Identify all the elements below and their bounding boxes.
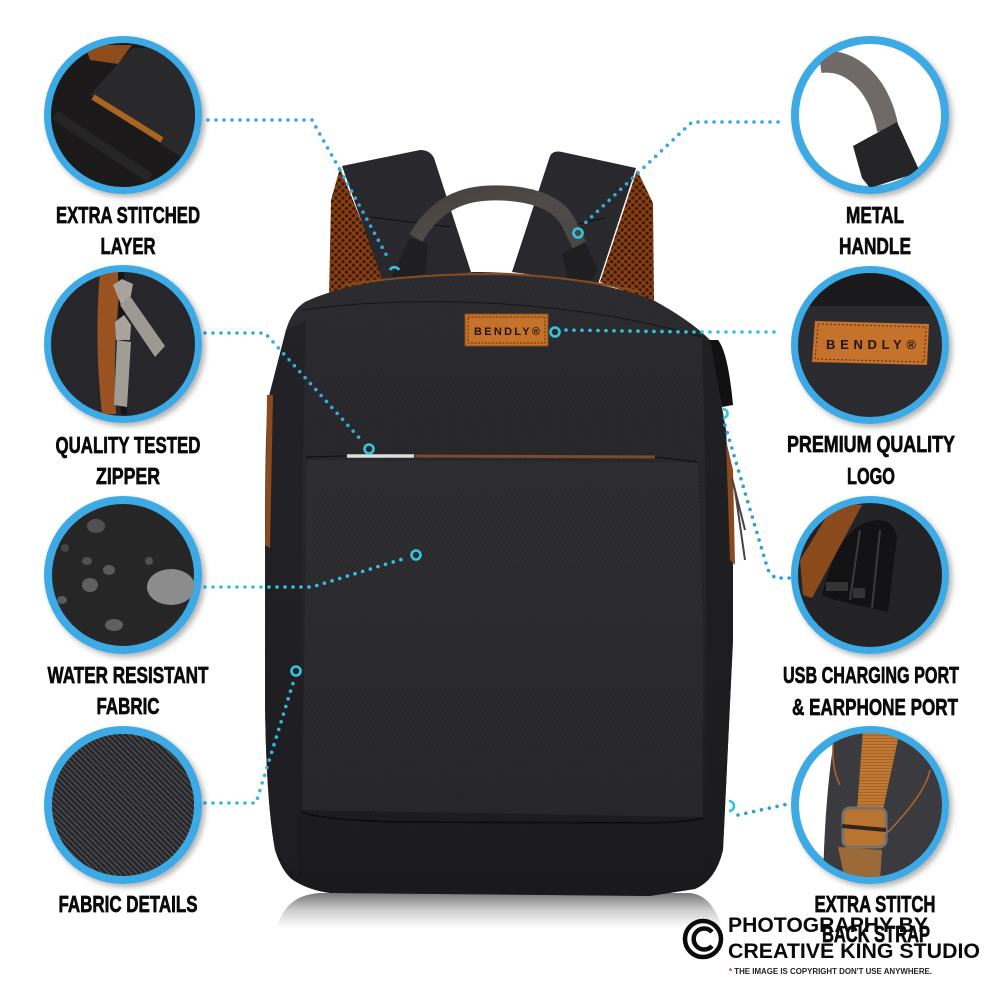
handle bbox=[416, 193, 580, 246]
ring: zipper bbox=[364, 444, 374, 454]
ring: stitched layer bbox=[390, 267, 399, 270]
label: usb charging port bbox=[783, 662, 959, 720]
pocket zipper bbox=[415, 456, 655, 457]
label: extra stitch back strap bbox=[814, 891, 936, 947]
detail: premium logo: BENDLY® bbox=[826, 337, 916, 352]
side zipper pull bbox=[732, 478, 745, 560]
label: extra stitch back strap: BACK STRAP bbox=[822, 921, 930, 947]
callout dotted lines bbox=[205, 120, 790, 815]
label: quality tested zipper: ZIPPER bbox=[96, 463, 160, 489]
label: premium quality logo: PREMIUM QUALITY bbox=[787, 431, 955, 457]
backpack illustration bbox=[265, 150, 745, 928]
front pocket panel bbox=[302, 460, 703, 817]
label: extra stitch back strap: EXTRA STITCH bbox=[814, 891, 936, 917]
label: extra stitched layer bbox=[56, 202, 200, 259]
leader: quality tested zipper bbox=[205, 333, 362, 441]
label: water resistant fabric: WATER RESISTANT bbox=[48, 662, 208, 688]
side panel right bbox=[702, 340, 733, 878]
leader: usb port bbox=[725, 425, 790, 578]
label: water resistant fabric: FABRIC bbox=[96, 693, 160, 719]
bag body shade bbox=[265, 272, 733, 896]
floor reflection bbox=[277, 893, 722, 928]
callout target rings bbox=[292, 228, 734, 811]
leader: extra stitched layer bbox=[208, 120, 388, 258]
ring: side seam bbox=[292, 666, 300, 676]
side zipper orange right bbox=[726, 440, 735, 565]
ring: fabric bbox=[412, 550, 420, 560]
left shoulder strap bbox=[342, 150, 471, 282]
ring: logo bbox=[550, 328, 560, 336]
detail: extra stitched layer bbox=[48, 40, 200, 190]
pocket seam bbox=[306, 456, 698, 462]
detail: fabric bbox=[48, 730, 198, 880]
leader: metal handle bbox=[584, 122, 778, 224]
copyright symbol bbox=[685, 921, 721, 957]
leader: premium logo bbox=[566, 330, 778, 332]
photography credit: CREATIVE KING STUDIO bbox=[728, 940, 980, 963]
label: extra stitched layer: LAYER bbox=[100, 233, 156, 259]
brand patch: BENDLY® bbox=[474, 326, 540, 338]
leader: extra stitch back strap bbox=[738, 804, 788, 815]
detail: premium logo bbox=[795, 270, 945, 420]
label: metal handle: HANDLE bbox=[839, 233, 911, 259]
handle left socket bbox=[390, 238, 428, 280]
side panel left bbox=[265, 320, 306, 878]
ring: handle bbox=[574, 228, 582, 238]
copyright notice: * THE IMAGE IS COPYRIGHT DON'T USE ANYWHERE. bbox=[729, 967, 932, 976]
lid seam bbox=[303, 302, 706, 338]
ring: back strap bbox=[729, 801, 734, 811]
label: quality tested zipper: QUALITY TESTED bbox=[56, 432, 200, 458]
right shoulder strap bbox=[512, 152, 636, 284]
detail: back strap bbox=[795, 730, 950, 880]
side zipper orange left bbox=[265, 395, 273, 548]
ring: usb bbox=[723, 409, 728, 418]
brand patch bbox=[465, 314, 548, 346]
handle right socket bbox=[562, 242, 598, 280]
label: premium quality logo: LOGO bbox=[847, 463, 895, 489]
label: fabric details: FABRIC DETAILS bbox=[58, 891, 198, 917]
label: quality tested zipper bbox=[56, 432, 200, 489]
detail: zipper bbox=[48, 269, 198, 420]
label: extra stitched layer: EXTRA STITCHED bbox=[56, 202, 200, 228]
photography credit bbox=[728, 914, 980, 963]
copyright watermark bbox=[685, 914, 980, 976]
photography credit: PHOTOGRAPHY BY bbox=[728, 914, 928, 937]
label: metal handle bbox=[839, 202, 911, 259]
bag body bbox=[265, 272, 733, 896]
label: premium quality logo bbox=[787, 431, 955, 489]
usb port housing bbox=[708, 340, 733, 407]
zipper silver pull bbox=[347, 454, 414, 458]
leader: water resistant bbox=[205, 558, 406, 587]
strap seams bbox=[370, 217, 605, 228]
left back mesh padding bbox=[329, 168, 385, 298]
label: water resistant fabric bbox=[48, 662, 208, 719]
detail: water resistant fabric bbox=[48, 500, 198, 650]
bottom panel seam bbox=[302, 812, 703, 823]
top zipper line bbox=[345, 274, 640, 292]
leader: fabric details bbox=[205, 680, 294, 803]
detail: metal handle bbox=[795, 40, 945, 190]
detail: usb port bbox=[795, 500, 945, 650]
right back mesh padding bbox=[600, 170, 654, 302]
label: metal handle: METAL bbox=[846, 202, 904, 228]
